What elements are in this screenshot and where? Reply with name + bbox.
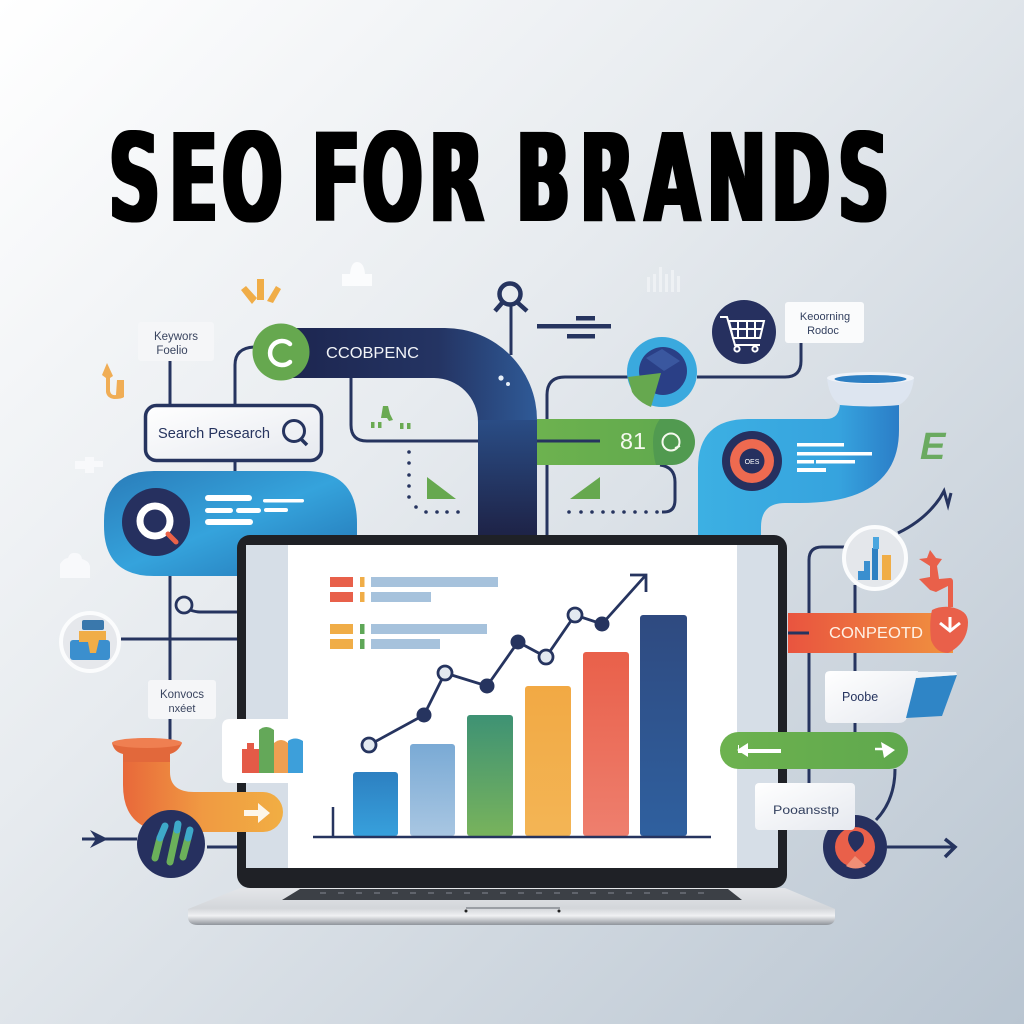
icon: target pin badge [823,815,887,879]
blue funnel pipe [698,372,914,536]
icon: pie badge [627,337,697,407]
green score bar: 81 [620,428,646,454]
label: reporting [785,302,864,343]
icon: target badge: OES [745,459,760,466]
icon: magnifier [284,420,307,445]
green arrow pill [720,732,908,769]
label: keywords [138,322,214,361]
icon: orange sparks [241,279,281,304]
label: keywords: Keywors [154,331,198,343]
icon: left arrow head [90,830,108,848]
icon: ring connector [176,597,192,613]
text lines [797,443,872,472]
shield [930,607,968,653]
card: probe: Poobe [842,690,878,704]
bar chart [313,615,711,837]
icon: magnifier badge [122,488,190,556]
red competitor bar [788,607,968,653]
card: probe [825,671,957,723]
orange funnel pipe [112,738,283,832]
red competitor bar: CONPEOTD [829,625,923,642]
pipe label: CCOBPENC [326,345,419,362]
icon: red arrow [919,550,953,607]
laptop screen [246,545,778,868]
dotted path with green triangle [407,450,460,514]
icon: right arrow head [943,839,955,857]
connector lines [82,305,953,847]
search box: Search Pesearch [158,426,270,442]
trend line [362,575,646,752]
icon: faint white tag [342,262,372,286]
panel: blue search banner [104,471,357,576]
pipe dots [498,375,510,386]
icon: faint bar glyph [647,267,680,292]
icon: chart badge right [844,527,906,589]
card: posts [755,783,855,830]
icon: left badge [61,613,119,671]
icon: key ring [495,284,527,311]
arrow [244,803,270,823]
label: keywords: Foelio [156,345,188,357]
green score bar [537,419,695,465]
icon: white building [60,553,90,578]
icon: white puzzle mark [75,457,103,473]
card: posts: Pooansstp [773,805,839,817]
icon: shopping cart badge [712,300,776,364]
legend rows [330,577,498,649]
label: keywords lower [148,680,216,719]
icon: green letter mark: E [920,426,947,468]
icon: dash marks [537,316,611,338]
navy pipe [280,328,537,536]
label: reporting: Keoorning [800,311,850,323]
label: keywords lower: nxéet [169,703,195,715]
label: reporting: Rodoc [807,325,839,337]
icon: small green figure [371,406,410,429]
laptop [188,535,835,925]
icon: dark bars badge [137,810,205,878]
funnel rim [827,378,914,406]
laptop bezel [237,535,787,888]
icon: target badge [722,431,782,491]
title: SEOFORBRANDS [109,107,889,250]
icon: orange up arrow [102,363,124,399]
icon: mini chart card [222,719,303,783]
icon: green C badge [252,324,310,380]
text lines [205,495,304,525]
laptop base [188,888,835,925]
green triangle lower [567,477,659,514]
label: keywords lower: Konvocs [160,689,204,701]
search box [146,406,322,460]
